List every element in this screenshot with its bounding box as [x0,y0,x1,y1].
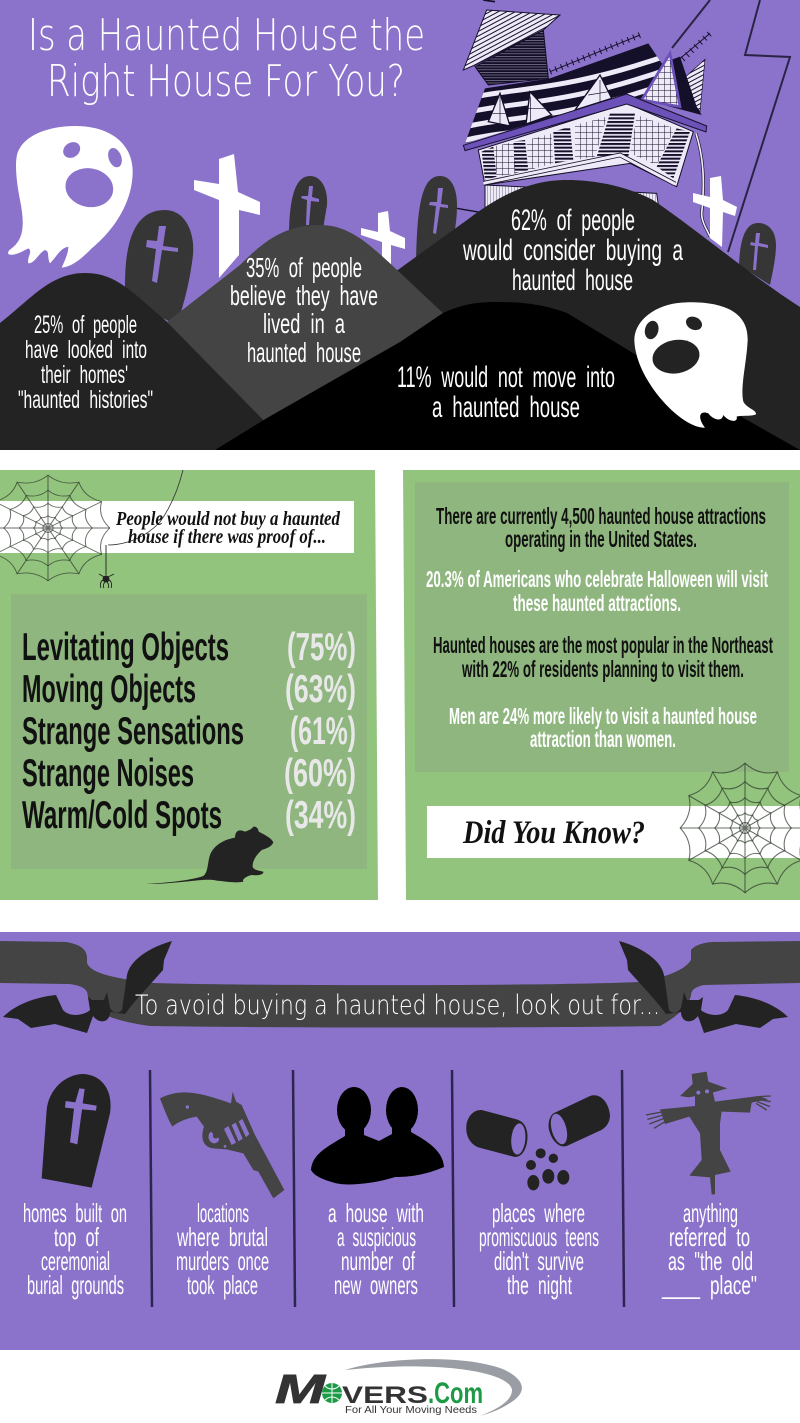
icon: revolver [160,1092,284,1198]
hill: front black [215,302,800,450]
text: suspicious owners: new owners [334,1270,418,1300]
heading bar [427,806,800,858]
text: burial grounds: burial grounds [27,1270,124,1300]
text block: 11% stat: a haunted house [432,391,580,424]
icon: gravestone small [289,176,327,235]
list background [11,594,367,869]
heading bar [0,501,354,553]
text: brutal murders: where brutal [176,1222,268,1252]
text block: 35% stat: 35% of people [246,252,362,283]
logo: Movers.com [275,1359,522,1416]
list percentages: (34%) [285,794,356,837]
icon: tombstone [42,1074,111,1188]
icon: lightning bolt outline [672,0,790,252]
text: brutal murders: murders once [176,1246,269,1276]
icon: bat left [3,941,172,1033]
icon: scarecrow [646,1072,771,1194]
text: burial grounds: top of [54,1222,99,1252]
icon: gravestone right of centre [416,176,457,262]
text block: 62% stat: 62% of people [511,204,635,237]
logo tagline: For All Your Moving Needs [345,1404,477,1416]
list labels [22,626,244,837]
text: brutal murders: took place [187,1270,258,1300]
text: promiscuous teens: didn't survive [494,1246,584,1276]
panel: hero background [0,0,800,450]
banner heading: To avoid buying a haunted house, look out for... [135,990,660,1021]
facts background [415,482,789,772]
panel: look out for [0,932,800,1350]
text block: 11% stat: 11% would not move into [397,361,615,394]
fact 2: these haunted attractions. [513,590,681,616]
spider web [680,763,800,893]
title: Is a Haunted House the [28,10,425,61]
dividers [150,1070,624,1307]
text: promiscuous teens: the night [507,1270,572,1300]
logo M: M [275,1366,326,1412]
text block: 35% stat [230,252,378,368]
hill: left dark [0,273,280,450]
list labels: Strange Noises [22,752,194,795]
icon: bat right [619,941,788,1033]
icon: two people [311,1087,444,1184]
heading text: People would not buy a haunted [115,508,341,530]
banner ribbon [0,941,800,1028]
icon: white cross left [194,154,260,278]
list labels: Levitating Objects [22,626,229,669]
icon: open capsule [466,1095,610,1190]
text block: 25% stat: have looked into [25,336,147,364]
text block: 11% stat [397,361,615,424]
panel: proof list [0,470,378,900]
icon: white cross small [361,211,405,270]
text: the old place [661,1198,757,1300]
title [28,10,425,107]
text block: 25% stat: 25% of people [34,311,137,339]
fact 4 [449,703,757,752]
list labels: Warm/Cold Spots [22,794,222,837]
list percentages: (63%) [285,668,356,711]
text block: 35% stat: haunted house [247,337,361,368]
list percentages [284,626,356,837]
text: the old place: anything [683,1198,738,1228]
text block: 62% stat: would consider buying a [462,234,683,267]
spider thread [108,470,183,545]
spider web [0,475,110,581]
text block: 35% stat: believe they have [230,280,378,311]
text: suspicious owners: number of [341,1246,415,1276]
panel: did you know [403,470,800,900]
text: brutal murders [176,1198,269,1300]
logo globe [322,1383,342,1403]
text: brutal murders: locations [197,1198,249,1228]
list labels: Strange Sensations [22,710,244,753]
list labels: Moving Objects [22,668,196,711]
icon: spider [99,545,114,588]
icon: ghost right [634,302,756,428]
heading text: house if there was proof of... [128,526,326,548]
fact 3 [433,632,773,682]
text: burial grounds [23,1198,127,1300]
logo wordmark: VERS [342,1382,428,1409]
fact 4: attraction than women. [530,726,676,752]
icon: gravestone far right [739,223,776,285]
text: the old place: referred to [669,1222,750,1252]
hill: centre grey [167,225,450,432]
icon: white cross right [693,176,737,247]
heading text [115,508,341,548]
text block: 62% stat [462,204,683,297]
text block: 25% stat [18,311,153,414]
icon: rat [146,827,273,884]
list percentages: (75%) [287,626,356,669]
list percentages: (60%) [284,752,356,795]
text: suspicious owners: a suspicious [337,1222,416,1252]
text block: 62% stat: haunted house [512,264,633,297]
text: burial grounds: homes built on [23,1198,127,1228]
logo .Com: .Com [428,1377,483,1410]
text: promiscuous teens [479,1198,599,1300]
text: suspicious owners [328,1198,424,1300]
fact 2 [426,566,768,616]
text: promiscuous teens: promiscuous teens [479,1222,599,1252]
illustration: haunted house [457,0,710,240]
text: burial grounds: ceremonial [41,1246,110,1276]
icon: ghost left [8,126,133,268]
list percentages: (61%) [290,710,356,753]
fact 1 [436,503,766,552]
hill: right dark [300,180,800,450]
text: suspicious owners: a house with [328,1198,424,1228]
icon: gravestone far left [125,210,193,325]
text block: 35% stat: lived in a [263,308,345,339]
heading text: Did You Know? [462,815,645,851]
logo swoosh [345,1359,522,1416]
text block: 25% stat: their homes' [41,361,128,389]
title: Right House For You? [47,56,405,107]
text: promiscuous teens: places where [492,1198,585,1228]
text block: 25% stat: "haunted histories" [18,386,153,414]
